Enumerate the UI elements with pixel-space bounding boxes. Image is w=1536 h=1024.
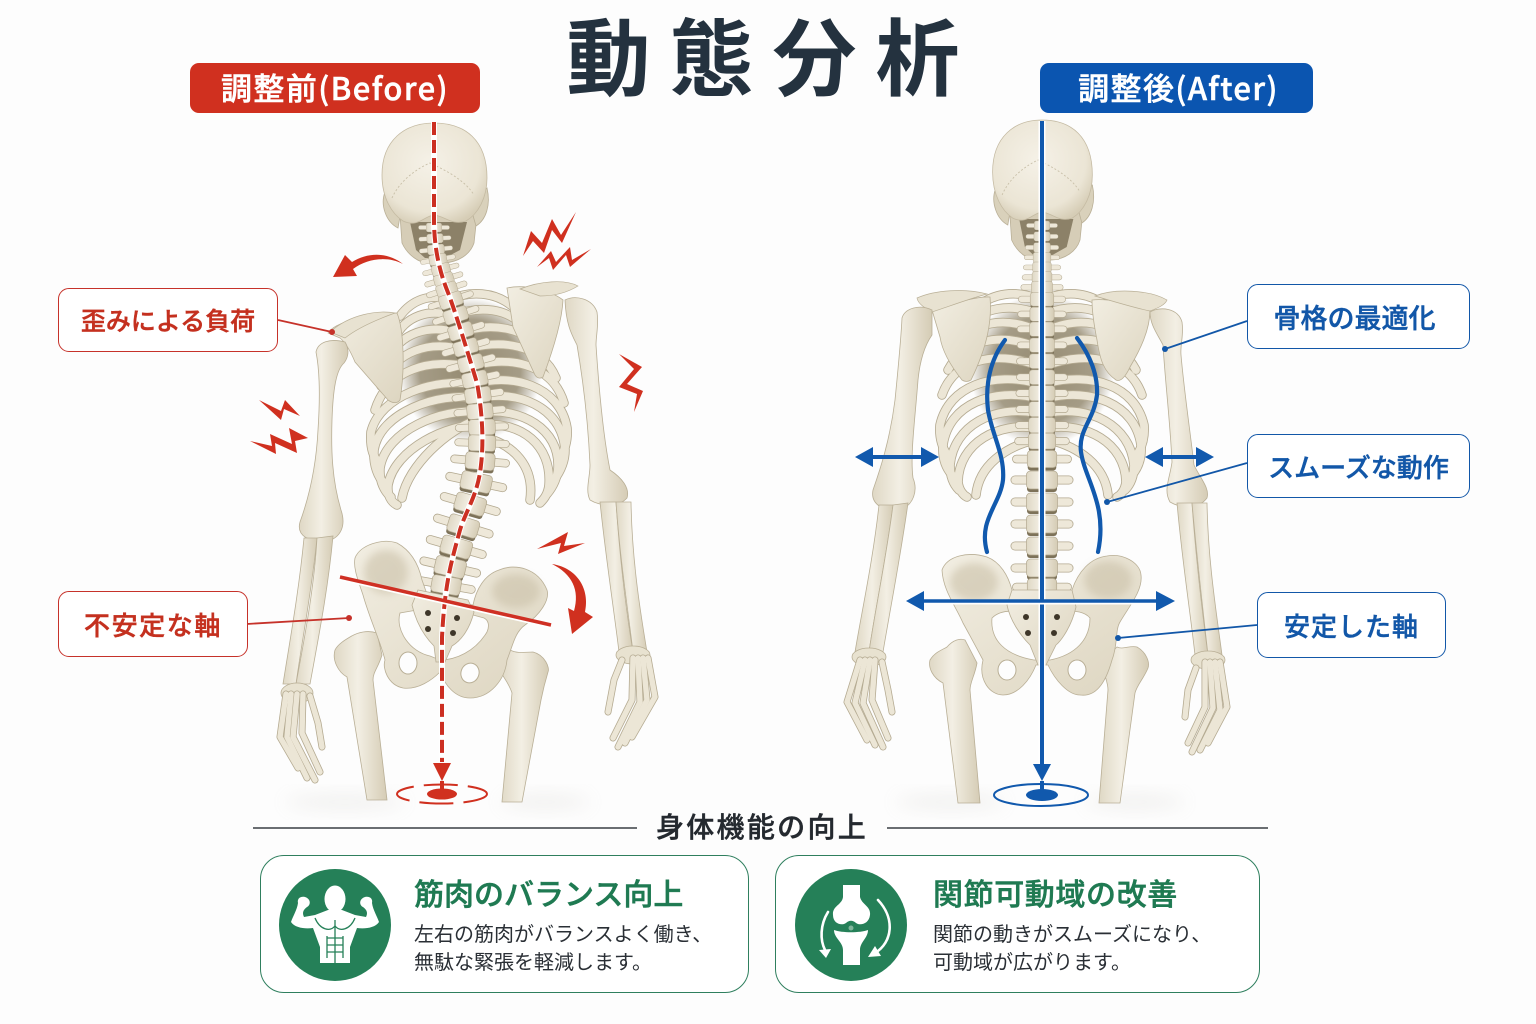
skeleton: before adjustment <box>280 123 655 802</box>
badge: after <box>1040 63 1313 113</box>
body text: 関節の動きがスムーズになり、 <box>933 918 1211 947</box>
body text <box>414 918 712 975</box>
callout: skeletal optimization: 骨格の最適化 <box>1274 297 1436 336</box>
pain zigzags <box>250 212 643 554</box>
mandible <box>400 215 477 263</box>
spine <box>419 223 506 601</box>
scapulae <box>328 282 578 403</box>
ground shadow: before <box>285 796 590 808</box>
arrow: hip rotation <box>552 564 593 634</box>
axis line: before (dashed, shifted) <box>434 122 482 762</box>
callout: load from distortion: 歪みによる負荷 <box>81 302 255 338</box>
scapulae <box>917 291 1167 382</box>
heading: joint range: 関節可動域の改善 <box>933 870 1178 914</box>
femurs <box>930 639 1149 803</box>
body text: 可動域が広がります。 <box>933 946 1131 975</box>
spine <box>1015 221 1069 598</box>
callout: stable axis: 安定した軸 <box>1284 606 1419 644</box>
panel: muscle balance <box>260 855 749 993</box>
leader lines: before <box>247 320 352 624</box>
callout: skeletal optimization <box>1247 284 1470 349</box>
mandible <box>1010 212 1083 260</box>
horizontal pelvis arrow <box>906 591 1175 611</box>
arrow head and ground target: before <box>397 763 487 804</box>
arm: viewer left <box>280 340 348 780</box>
double arrow: left arm <box>855 447 939 467</box>
callout: load from distortion <box>58 288 278 352</box>
pelvis <box>942 555 1141 695</box>
heading: muscle balance: 筋肉のバランス向上 <box>414 870 683 914</box>
callout: smooth motion <box>1247 434 1470 498</box>
panel: joint range of motion <box>775 855 1260 993</box>
icon: knee joint <box>795 869 907 981</box>
femurs <box>334 632 548 802</box>
arrow head and ground target: after <box>994 764 1088 806</box>
icon: muscular torso <box>279 869 391 981</box>
body text: 左右の筋肉がバランスよく働き、 <box>414 918 712 947</box>
body curve lines: after <box>985 338 1100 552</box>
cranium <box>993 120 1094 225</box>
arm: viewer left <box>847 307 932 747</box>
section heading: 身体機能の向上 <box>656 806 868 846</box>
callout: stable axis <box>1257 592 1446 658</box>
badge: after: 調整後(After) <box>1078 64 1279 109</box>
cranium <box>382 123 488 228</box>
callout: unstable axis: 不安定な軸 <box>84 606 222 642</box>
body text <box>933 918 1211 975</box>
section divider lines <box>253 827 1268 829</box>
pelvis <box>355 541 548 698</box>
skeleton: after adjustment <box>847 120 1227 803</box>
ground shadow: after <box>895 796 1185 808</box>
body text: 無駄な緊張を軽減します。 <box>414 946 652 975</box>
rib cage <box>371 294 567 505</box>
arrow: shoulder shift <box>333 255 403 277</box>
axis line: after (straight) <box>1038 121 1046 766</box>
badge: before: 調整前(Before) <box>221 64 449 109</box>
arm: viewer right <box>1150 309 1227 752</box>
double arrow: right arm <box>1145 447 1214 467</box>
tilted pelvis line <box>340 577 551 627</box>
rib cage <box>940 294 1144 497</box>
callout: unstable axis <box>58 591 248 657</box>
callout: smooth motion: スムーズな動作 <box>1268 448 1449 484</box>
arm: viewer right <box>565 298 655 747</box>
leader lines: after <box>1104 321 1257 641</box>
